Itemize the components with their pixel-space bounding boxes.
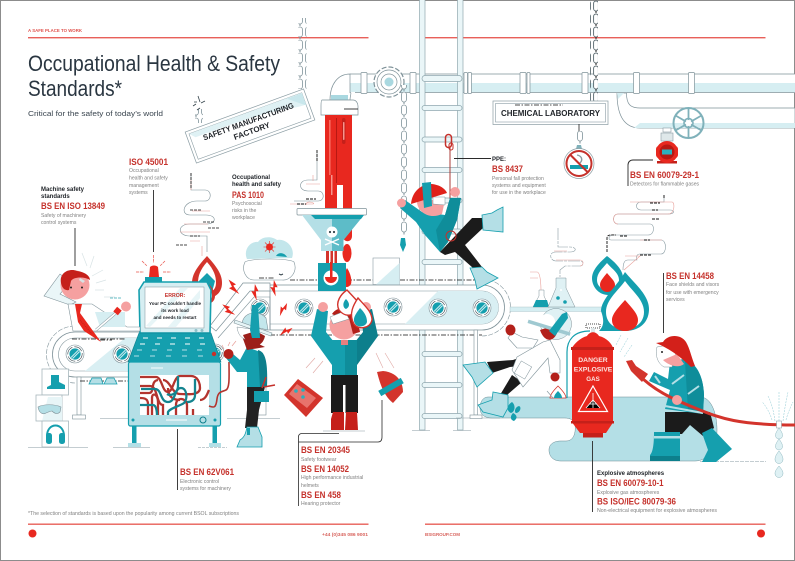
callout: ISO 45001: ISO 45001 (129, 157, 168, 167)
firefighter with hose (626, 336, 795, 462)
icon: flame on machine (192, 256, 222, 318)
callout: BS EN 60079-29-1: BS EN 60079-29-1 (630, 170, 699, 180)
callout: explosive atmospheres (592, 441, 717, 514)
sign: chemical laboratory (493, 0, 608, 124)
header label: A SAFE PLACE TO WORK (28, 28, 83, 33)
left conveyor belt (46, 279, 140, 419)
callout: BS EN 14458: for use with emergency (666, 290, 719, 296)
pipes at the top (321, 72, 795, 115)
footer rules (28, 524, 766, 525)
footer url: BSIGROUP.COM (425, 532, 460, 538)
callout: personal protective standards: BS EN 458 (301, 490, 341, 500)
lightning bolts (221, 278, 294, 336)
subtitle: Critical for the safety of today’s world (28, 109, 163, 118)
monitor: and needs to restart (153, 315, 197, 320)
climbing worker with harness (397, 134, 503, 289)
callout: machine safety standards: BS EN ISO 13849 (41, 201, 105, 211)
floor lines (28, 418, 766, 462)
puddle (480, 397, 717, 461)
man with tie (44, 253, 140, 342)
callout: machine safety standards (41, 187, 105, 266)
callout: BS EN 14458: services (666, 297, 685, 303)
footnote: *The selection of standards is based upon the popularity among current BSOL subscriptions (28, 511, 239, 517)
lab shelf with flasks (510, 278, 602, 312)
callout: explosive atmospheres: Explosive atmospheres (597, 471, 665, 477)
callout: BS EN 62V061 (178, 429, 234, 492)
callout: machine safety standards: control systems (41, 220, 77, 226)
callout: explosive atmospheres: Explosive gas atmospheres (597, 490, 660, 496)
callout: machine safety standards: Machine safety (41, 187, 85, 193)
callout: ISO 45001 (129, 157, 168, 252)
danger gas cylinder: DANGER (578, 357, 608, 364)
callout: BS EN 62V061: systems for machinery (180, 486, 231, 492)
callout: BS EN 14458: BS EN 14458 (666, 271, 714, 281)
callout: PAS 1010: workplace (232, 215, 255, 221)
callout: ISO 45001: management (129, 183, 159, 189)
callout: PPE BS 8437: BS 8437 (492, 164, 523, 174)
title (28, 51, 280, 101)
header rules (28, 37, 766, 38)
callout: BS EN 14458: Face shields and visors (666, 282, 720, 288)
funnel with skull (297, 208, 366, 251)
icon: no smoking sign (564, 124, 594, 178)
machine (128, 255, 229, 447)
callout: BS EN 62V061: Electronic control (180, 479, 219, 485)
callout: PAS 1010 (232, 175, 282, 221)
callout: PPE BS 8437 (454, 157, 546, 196)
callout: PPE BS 8437: systems and equipment (492, 183, 546, 189)
callout: PAS 1010: PAS 1010 (232, 190, 264, 200)
main conveyor belt (270, 279, 510, 418)
warning beacon (136, 255, 171, 282)
callout: PAS 1010: Occupational (232, 175, 270, 181)
callout: explosive atmospheres: BS EN 60079-10-1 (597, 478, 664, 488)
icon: gear valve (374, 67, 404, 97)
rising belt between machine and conveyor (206, 283, 270, 415)
callout: BS EN 60079-29-1: Detectors for flammable gases (630, 182, 700, 188)
fallen laptop icon (284, 358, 323, 417)
danger gas cylinder: EXPLOSIVE (574, 366, 613, 374)
callout: personal protective standards (298, 400, 382, 507)
monitor: Your PC couldn’t handle (149, 301, 201, 306)
ladder (420, 0, 463, 430)
title: Standards* (28, 76, 122, 101)
callout: personal protective standards: High performance industrial (301, 475, 363, 481)
danger gas cylinder: GAS (586, 376, 600, 383)
icon: gas detector (656, 128, 678, 164)
callout: PAS 1010: health and safety (232, 182, 282, 188)
callout: explosive atmospheres: BS ISO/IEC 80079-36 (597, 496, 676, 506)
callout: personal protective standards: Hearing protector (301, 501, 341, 507)
hose spray and water drops (762, 392, 793, 478)
monitor: its work load (161, 308, 189, 313)
fallen helmet icon (376, 353, 404, 403)
callout: BS EN 14458 (664, 271, 720, 333)
callout: PAS 1010: Psychosocial (232, 201, 262, 207)
chain from gear valve (399, 85, 407, 252)
icon: twin flames (592, 256, 649, 331)
red liquid (325, 115, 352, 287)
branch pipe and valve wheel (617, 93, 795, 138)
sign: safety manufacturing factory: FACTORY (232, 120, 272, 142)
footer phone: +44 (0)345 086 9001 (322, 532, 368, 538)
footer dot left (28, 530, 36, 538)
callout: explosive atmospheres: Non-electrical equipment for explosive atmospheres (597, 508, 717, 514)
callout: ISO 45001: health and safety (129, 176, 168, 182)
gas squiggle: cloud (290, 150, 323, 205)
callout: ISO 45001: systems (129, 190, 148, 196)
gas squiggle: left flame (176, 173, 220, 256)
callout: BS EN 60079-29-1 (628, 160, 700, 188)
callout: machine safety standards: Safety of machinery (41, 213, 86, 219)
gas squiggle: flasks (530, 228, 583, 290)
box on conveyor (373, 258, 400, 284)
footer dot right (757, 530, 765, 538)
weather cloud icon (244, 237, 295, 280)
danger gas cylinder (567, 324, 632, 438)
callout: ISO 45001: Occupational (129, 168, 159, 174)
gas squiggle: flames (607, 195, 674, 270)
lower cabinet with wires (128, 362, 229, 447)
teal reagent block with thermometer (318, 251, 346, 291)
sign: chemical laboratory: CHEMICAL LABORATORY (501, 109, 601, 118)
callout: personal protective standards: BS EN 14052 (301, 464, 349, 474)
control desk (128, 333, 221, 362)
title: Occupational Health & Safety (28, 51, 280, 76)
callout: PAS 1010: risks in the (232, 208, 257, 214)
callout: machine safety standards: standards (41, 194, 70, 200)
sign: safety manufacturing factory (185, 18, 315, 163)
callout: personal protective standards: helmets (301, 483, 319, 489)
lab worker slipping (463, 308, 572, 421)
small flame under gas pipe (547, 386, 566, 398)
callout: PPE BS 8437: Personal fall protection (492, 176, 544, 182)
sign: safety manufacturing factory: SAFETY MANUFACTURING (202, 101, 295, 142)
technician with wrench (222, 305, 275, 447)
callout: PPE BS 8437: PPE: (492, 157, 506, 163)
callout: personal protective standards: BS EN 20345 (301, 445, 350, 455)
monitor: ERROR: (165, 293, 185, 299)
monitor (139, 282, 211, 333)
man holding flames (311, 290, 378, 430)
callout: PPE BS 8437: for use in the workplace (492, 190, 546, 196)
callout: BS EN 62V061: BS EN 62V061 (180, 467, 234, 477)
PPE boxes (36, 369, 68, 447)
callout: personal protective standards: Safety footwear (301, 457, 337, 463)
